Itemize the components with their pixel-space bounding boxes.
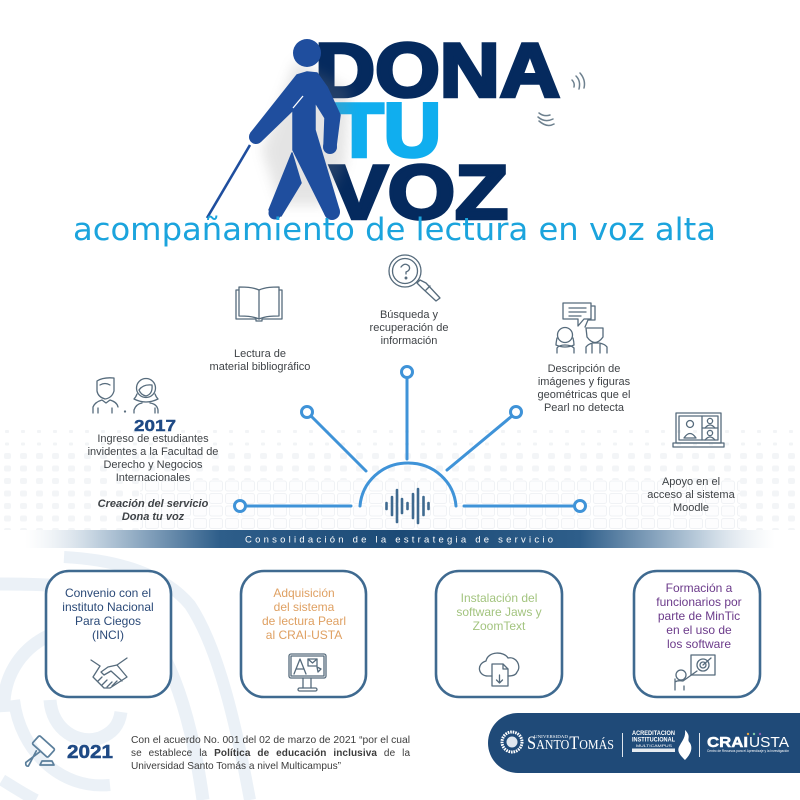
text: descripcion: Descripción de — [548, 363, 620, 375]
panel: formacion funcionarios: parte de MinTic — [658, 609, 740, 623]
text: descripcion: geométricas que el — [538, 389, 630, 401]
text: 2017 milestone: invidentes a la Facultad de — [88, 446, 218, 458]
panel: adquisicion Pearl: al CRAI-USTA — [266, 628, 342, 642]
panel: adquisicion Pearl: de lectura Pearl — [262, 614, 346, 628]
logo: CRAI USTA: CRAI — [707, 734, 748, 751]
title: Dona tu voz — [315, 28, 560, 236]
text: acuerdo 2021: Universidad Santo Tomás a nivel Multicampus” — [131, 760, 341, 772]
icon: two people with speech bubble — [556, 303, 607, 353]
text: busqueda: información — [381, 335, 437, 347]
panel: institutional logos — [488, 713, 800, 773]
title: Dona tu voz: DONA — [315, 28, 560, 114]
icon: gavel — [24, 735, 55, 766]
icon: open book — [236, 287, 282, 321]
icon: cloud download — [479, 653, 519, 686]
panel: convenio INCI: Para Ciegos — [75, 614, 141, 628]
logo: CRAI USTA — [707, 733, 789, 753]
icon: handshake — [91, 658, 127, 688]
title: Dona tu voz: VOZ — [330, 150, 508, 236]
panel: formacion funcionarios: Formación a — [666, 581, 733, 595]
panel: adquisicion Pearl: del sistema — [274, 600, 335, 614]
icon: magnifying glass with question mark — [389, 255, 440, 301]
text: descripcion: imágenes y figuras — [538, 376, 631, 388]
panel: instalacion software — [436, 571, 562, 697]
text: 2017 milestone — [88, 418, 218, 523]
logo: Universidad Santo Tomas: SANTOTOMÁS — [527, 733, 614, 754]
text: acuerdo 2021 — [131, 734, 410, 772]
icon: sound waves — [538, 73, 584, 125]
text: descripcion — [538, 363, 631, 414]
panel: convenio INCI — [46, 571, 171, 697]
banner: consolidacion — [25, 530, 775, 548]
title: Dona tu voz: TU — [335, 88, 441, 174]
text: 2017 milestone: 2017 — [134, 418, 176, 435]
text: 2017 milestone: Derecho y Negocios — [103, 459, 203, 471]
text: lectura: Lectura de — [234, 348, 286, 360]
text: descripcion: Pearl no detecta — [544, 402, 625, 414]
logo: Universidad Santo Tomas: UNIVERSIDAD — [534, 734, 569, 739]
subtitle: acompañamiento de lectura en voz alta — [73, 212, 716, 248]
panel: instalacion software: Instalación del — [461, 591, 537, 605]
logo: CRAI USTA: Centro de Recursos para el Aprendizaje y la Investigación — [707, 749, 789, 753]
panel: instalacion software: software Jaws y — [456, 605, 542, 619]
background dot pattern — [0, 425, 800, 530]
icon: laptop video call — [673, 413, 724, 447]
panel: instalacion software: ZoomText — [473, 619, 526, 633]
icon: monitor with letter A — [289, 654, 326, 691]
radial hub diagram — [234, 366, 586, 523]
panel: formacion funcionarios: los software — [667, 637, 731, 651]
panel: formacion funcionarios — [634, 571, 760, 697]
icon: audio waveform — [386, 489, 428, 523]
panel: adquisicion Pearl: Adquisición — [273, 586, 335, 600]
text: 2017 milestone: Internacionales — [116, 472, 191, 484]
text: 2017 milestone: Ingreso de estudiantes — [97, 433, 209, 445]
logo: acreditacion institucional: INSTITUCIONAL — [632, 738, 675, 744]
text: busqueda: recuperación de — [370, 322, 448, 334]
text: apoyo moodle: acceso al sistema — [647, 489, 736, 501]
watermark arcs — [0, 557, 250, 800]
panel: formacion funcionarios: funcionarios por — [656, 595, 742, 609]
icon: person walking with white cane — [207, 39, 350, 220]
logo: acreditacion institucional: MULTICAMPUS — [636, 743, 672, 748]
logo: acreditacion institucional — [632, 730, 691, 760]
logo: acreditacion institucional: ACREDITACION — [632, 731, 675, 737]
text: apoyo moodle — [647, 476, 736, 514]
panel: convenio INCI: (INCI) — [92, 628, 124, 642]
text: 2017 milestone: Creación del servicio — [98, 498, 209, 510]
text: acuerdo 2021: Con el acuerdo No. 001 del 02 de marzo de 2021 “por el cual — [131, 734, 410, 746]
year 2021: 2021 — [67, 741, 113, 762]
panel: adquisicion Pearl — [241, 571, 366, 697]
text: busqueda: Búsqueda y — [380, 309, 439, 321]
text: 2017 milestone: Dona tu voz — [122, 511, 185, 523]
text: acuerdo 2021: se establece la Política de educación inclusiva de la — [131, 748, 410, 759]
text: apoyo moodle: Apoyo en el — [662, 476, 720, 488]
panel: formacion funcionarios: en el uso de — [666, 623, 732, 637]
panel: convenio INCI: Convenio con el — [65, 586, 151, 600]
text: busqueda — [370, 309, 448, 347]
icon: man and woman — [93, 378, 158, 413]
text: lectura — [210, 348, 310, 373]
text: apoyo moodle: Moodle — [673, 502, 709, 514]
icon: teacher with target board — [675, 655, 715, 690]
banner: consolidacion: Consolidación de la estrategia de servicio — [245, 534, 556, 546]
text: lectura: material bibliográfico — [210, 361, 310, 373]
panel: convenio INCI: instituto Nacional — [62, 600, 154, 614]
logo: CRAI USTA: USTA — [749, 734, 789, 751]
